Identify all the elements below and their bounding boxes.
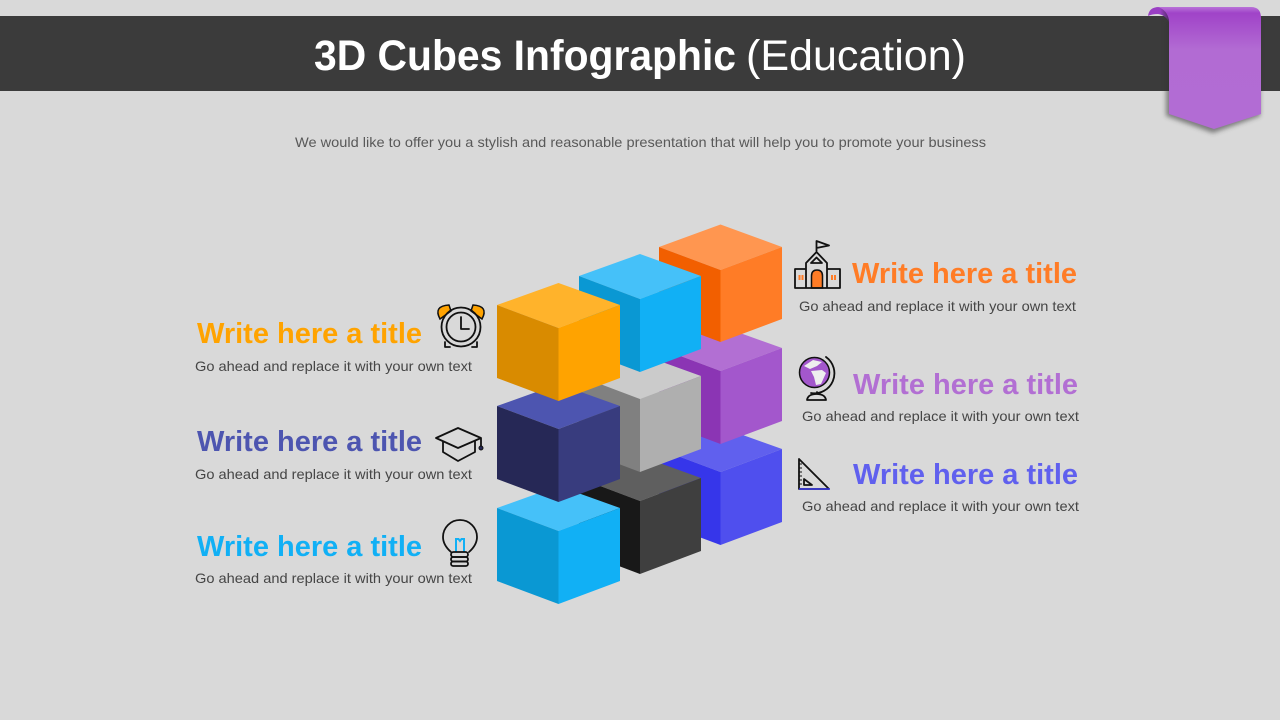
- title: (Education): [746, 32, 966, 80]
- text: Go ahead and replace it with your own text: [195, 358, 472, 374]
- heading: Write here a title: [852, 258, 1077, 290]
- icon: light bulb: [443, 520, 477, 566]
- text: Go ahead and replace it with your own text: [802, 408, 1079, 424]
- heading: Write here a title: [197, 531, 422, 563]
- cube: navy: [497, 384, 620, 502]
- block: violet right item: [802, 459, 1079, 514]
- cube: violet: [659, 427, 782, 545]
- 3D cube stack: [497, 224, 782, 604]
- text: Go ahead and replace it with your own text: [799, 298, 1076, 314]
- text: Go ahead and replace it with your own text: [195, 466, 472, 482]
- cube: gray: [579, 354, 701, 472]
- cube: light blue: [497, 486, 620, 604]
- text: Go ahead and replace it with your own text: [195, 570, 472, 586]
- heading: Write here a title: [197, 426, 422, 458]
- text: Go ahead and replace it with your own text: [802, 498, 1079, 514]
- icon: globe: [800, 357, 834, 400]
- icon: alarm clock: [438, 305, 484, 347]
- cube: amber: [497, 283, 620, 401]
- ribbon bookmark: [1148, 7, 1261, 133]
- heading: Write here a title: [197, 318, 422, 350]
- heading: Write here a title: [853, 459, 1078, 491]
- block: purple right item: [802, 369, 1079, 424]
- subtitle: We would like to offer you a stylish and reasonable presentation that will help you to promote your business: [295, 134, 986, 150]
- icon: school building: [795, 241, 840, 288]
- cube: purple: [659, 326, 782, 444]
- title: 3D Cubes Infographic: [314, 32, 736, 80]
- icon: graduation cap: [436, 428, 483, 461]
- block: navy left item: [195, 426, 472, 482]
- heading: Write here a title: [853, 369, 1078, 401]
- cube: black: [579, 456, 701, 574]
- cube: orange: [659, 224, 782, 342]
- cube: blue: [579, 254, 701, 372]
- block: blue left item: [195, 531, 472, 586]
- block: orange right item: [799, 258, 1077, 314]
- title bar: [0, 16, 1280, 91]
- icon: set square: [799, 459, 830, 489]
- block: amber left item: [195, 318, 472, 374]
